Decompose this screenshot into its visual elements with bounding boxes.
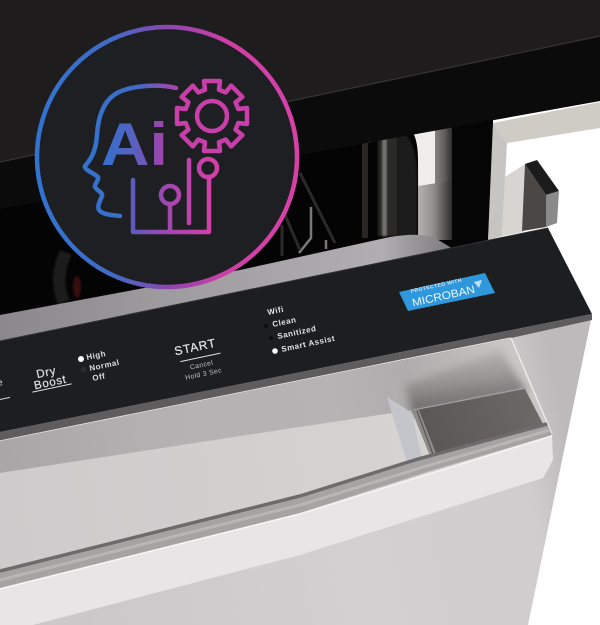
curved tub shadow xyxy=(398,128,417,236)
handle light face xyxy=(0,410,432,570)
start label: START xyxy=(173,336,217,358)
dry boost options: High xyxy=(86,349,107,362)
start label xyxy=(173,336,223,382)
status indicators: Sanitized xyxy=(277,324,317,341)
microban badge: MICROBAN xyxy=(411,284,476,309)
countertop xyxy=(0,0,600,209)
handle groove xyxy=(0,423,552,588)
cabinet side panel xyxy=(488,102,600,240)
status indicators: Clean xyxy=(272,315,297,329)
rack wires xyxy=(300,173,335,243)
status indicators: Wifi xyxy=(267,305,285,317)
tub lower xyxy=(418,181,450,240)
icon: Ai lettering: Ai xyxy=(101,111,168,178)
microban badge: PROTECTED WITH xyxy=(410,278,462,295)
bracket xyxy=(502,160,559,236)
icon: gear xyxy=(177,81,247,151)
icon: head outline xyxy=(85,86,176,216)
black support column xyxy=(452,95,493,248)
left wedge of handle end xyxy=(387,397,422,462)
dry boost options xyxy=(78,349,120,383)
red reflection xyxy=(73,276,81,298)
handle recess band xyxy=(0,338,552,473)
control panel xyxy=(0,228,592,441)
white band below groove xyxy=(0,435,553,625)
dry boost label: Dry xyxy=(35,365,57,381)
microban badge xyxy=(399,273,495,311)
dry boost label: Boost xyxy=(33,374,68,392)
tub highlight xyxy=(407,117,435,189)
door top lip xyxy=(0,235,460,350)
left rack shadow xyxy=(53,250,72,305)
status indicators: Smart Assist xyxy=(281,334,336,354)
badge circle xyxy=(37,27,297,287)
dry boost label xyxy=(32,365,72,393)
dry boost options: Off xyxy=(92,371,106,383)
AI badge xyxy=(37,27,297,287)
door handle xyxy=(0,338,553,625)
start label: Hold 3 Sec xyxy=(185,367,223,382)
handle end cap xyxy=(412,389,544,458)
tub side strip xyxy=(435,110,453,240)
dry boost options: Normal xyxy=(89,358,120,373)
dishwasher interior xyxy=(0,90,460,345)
status indicators xyxy=(264,305,336,354)
partial cycle label xyxy=(0,377,10,400)
handle end shadow xyxy=(405,350,528,415)
tub post xyxy=(362,130,368,238)
stainless door body xyxy=(0,315,592,625)
start label: Cancel xyxy=(189,360,214,371)
icon: circuit chart xyxy=(133,159,217,232)
